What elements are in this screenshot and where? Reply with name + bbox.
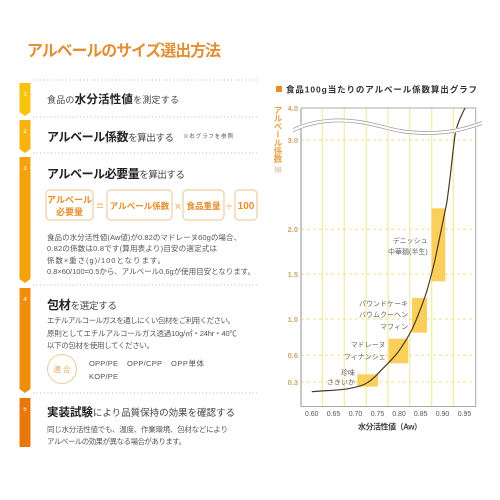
range bars bbox=[357, 208, 445, 387]
step 5 heading: 実装試験により品質保持の効果を確認する bbox=[47, 405, 235, 419]
bar: danish bbox=[432, 208, 445, 281]
bar: chinmi bbox=[357, 374, 378, 387]
step 4 body text: 以下の包材を使用してください。 bbox=[47, 340, 154, 350]
y tick labels: 0.3 bbox=[288, 378, 298, 387]
step 1 marker bbox=[20, 83, 30, 116]
formula box: coefficient bbox=[107, 190, 172, 220]
step 3 body text: 係数×重さ(g)/100となります。 bbox=[47, 255, 165, 265]
step 5 body text bbox=[47, 424, 228, 446]
formula: ÷ bbox=[226, 201, 232, 213]
food labels: バウムクーヘン bbox=[359, 311, 408, 319]
x tick labels: 0.70 bbox=[349, 411, 362, 418]
chart bbox=[273, 104, 482, 432]
food labels: パウンドケーキ bbox=[359, 300, 408, 308]
step 2 heading: アルベール係数を算出する bbox=[47, 129, 174, 144]
frame bbox=[301, 108, 476, 406]
step 5 marker: 5 bbox=[23, 407, 27, 413]
formula box: food weight: 食品重量 bbox=[186, 201, 221, 211]
title: アルベールのサイズ選出方法 bbox=[27, 41, 221, 60]
step 3 body text: 0.82の係数は0.8です(算用表より)目安の選定式は bbox=[47, 243, 218, 253]
y tick labels: 0.6 bbox=[288, 351, 298, 360]
bar: pound cake bbox=[412, 298, 427, 333]
x tick labels: 0.85 bbox=[414, 411, 428, 418]
step 4 marker bbox=[20, 288, 30, 393]
suitable materials: OPP/PE bbox=[89, 359, 118, 368]
formula box: required amount: 必要量 bbox=[56, 206, 83, 217]
suitable materials: OPP単体 bbox=[171, 358, 204, 368]
food labels bbox=[327, 236, 428, 386]
suitable materials: OPP/CPP bbox=[127, 359, 162, 368]
step 3 bbox=[20, 157, 257, 283]
food labels: さきいか bbox=[327, 378, 355, 386]
bar: madeleine bbox=[389, 339, 408, 363]
curve bbox=[312, 108, 465, 392]
y tick labels: 3.0 bbox=[288, 136, 298, 145]
food labels: マフィン bbox=[380, 323, 408, 331]
food labels: デニッシュ bbox=[393, 236, 428, 245]
food labels: 中華麺(半生) bbox=[388, 247, 428, 256]
step 4 body text bbox=[47, 315, 238, 350]
formula box: coefficient: アルベール係数 bbox=[110, 201, 170, 211]
suitable materials: KOP/PE bbox=[89, 372, 118, 381]
step 5 body text: アルベールの効果が異なる場合があります。 bbox=[47, 436, 186, 446]
x tick labels: 0.95 bbox=[458, 411, 471, 418]
step 3 marker: 3 bbox=[23, 166, 27, 172]
suitable badge: 適 合 bbox=[53, 364, 71, 374]
graph heading: 食品100g当たりのアルベール係数算出グラフ bbox=[286, 84, 477, 94]
step 1 heading: 食品の水分活性値を測定する bbox=[47, 92, 179, 106]
y axis title: (g) bbox=[274, 167, 282, 173]
food labels: マドレーヌ bbox=[351, 341, 386, 349]
x tick labels bbox=[305, 411, 471, 418]
formula: = bbox=[96, 199, 104, 213]
formula: × bbox=[175, 201, 181, 213]
step 5 body text: 同じ水分活性値でも、温度、作業環境、包材などにより bbox=[47, 424, 228, 434]
step 3 body text: 0.8×60/100=0.5から、アルベール0.6gが使用目安となります。 bbox=[47, 266, 255, 276]
formula box: required amount: アルベール bbox=[47, 195, 92, 205]
step 3 body text bbox=[47, 232, 255, 276]
x tick labels: 0.90 bbox=[436, 411, 449, 418]
formula box: food weight bbox=[183, 190, 224, 220]
x axis title: 水分活性値（Aw） bbox=[358, 422, 422, 432]
step 3 heading: アルベール必要量を算出する bbox=[47, 166, 185, 181]
formula box: 100: 100 bbox=[238, 201, 255, 212]
step 2 marker: 2 bbox=[23, 129, 27, 135]
x tick labels: 0.75 bbox=[371, 411, 384, 418]
step 5 bbox=[20, 398, 235, 447]
y tick labels bbox=[288, 104, 298, 387]
formula box: required amount bbox=[46, 190, 93, 220]
step 4 marker: 4 bbox=[23, 297, 27, 303]
suitable materials bbox=[89, 358, 204, 381]
y tick labels: 4.0 bbox=[288, 104, 298, 113]
food labels: 珍味 bbox=[341, 368, 355, 377]
food labels: フィナンシェ bbox=[344, 353, 386, 361]
formula box: 100 bbox=[235, 190, 257, 220]
x tick labels: 0.80 bbox=[392, 411, 406, 418]
step 2 marker bbox=[20, 120, 30, 153]
formula bbox=[46, 190, 257, 220]
step 3 body text: 食品の水分活性値(Aw値)が0.82のマドレーヌ60gの場合、 bbox=[47, 232, 241, 242]
y axis title: アルベール係数 bbox=[273, 106, 283, 164]
step 3 marker bbox=[20, 157, 30, 283]
step 4 body text: エチルアルコールガスを通しにくい包材をご利用ください。 bbox=[47, 315, 235, 325]
step 4 heading: 包材を選定する bbox=[47, 297, 117, 312]
gridlines bbox=[301, 108, 476, 406]
suitable badge bbox=[48, 354, 76, 384]
step 2 bbox=[20, 120, 233, 153]
y tick labels: 1.5 bbox=[288, 270, 298, 279]
axis break bbox=[293, 119, 482, 134]
step 2 note: ※右グラフを参照 bbox=[183, 132, 233, 140]
x tick labels: 0.60 bbox=[305, 411, 319, 418]
step 4 body text: 原則としてエチルアルコールガス透過10g/㎡・24hr・40℃ bbox=[47, 328, 238, 338]
step 4 bbox=[20, 288, 238, 393]
y tick labels: 1.0 bbox=[288, 315, 298, 324]
step 5 marker bbox=[20, 398, 30, 447]
step 1 bbox=[20, 83, 179, 116]
y tick labels: 2.0 bbox=[288, 225, 298, 234]
step 1 marker: 1 bbox=[23, 92, 27, 98]
x tick labels: 0.65 bbox=[327, 411, 340, 418]
